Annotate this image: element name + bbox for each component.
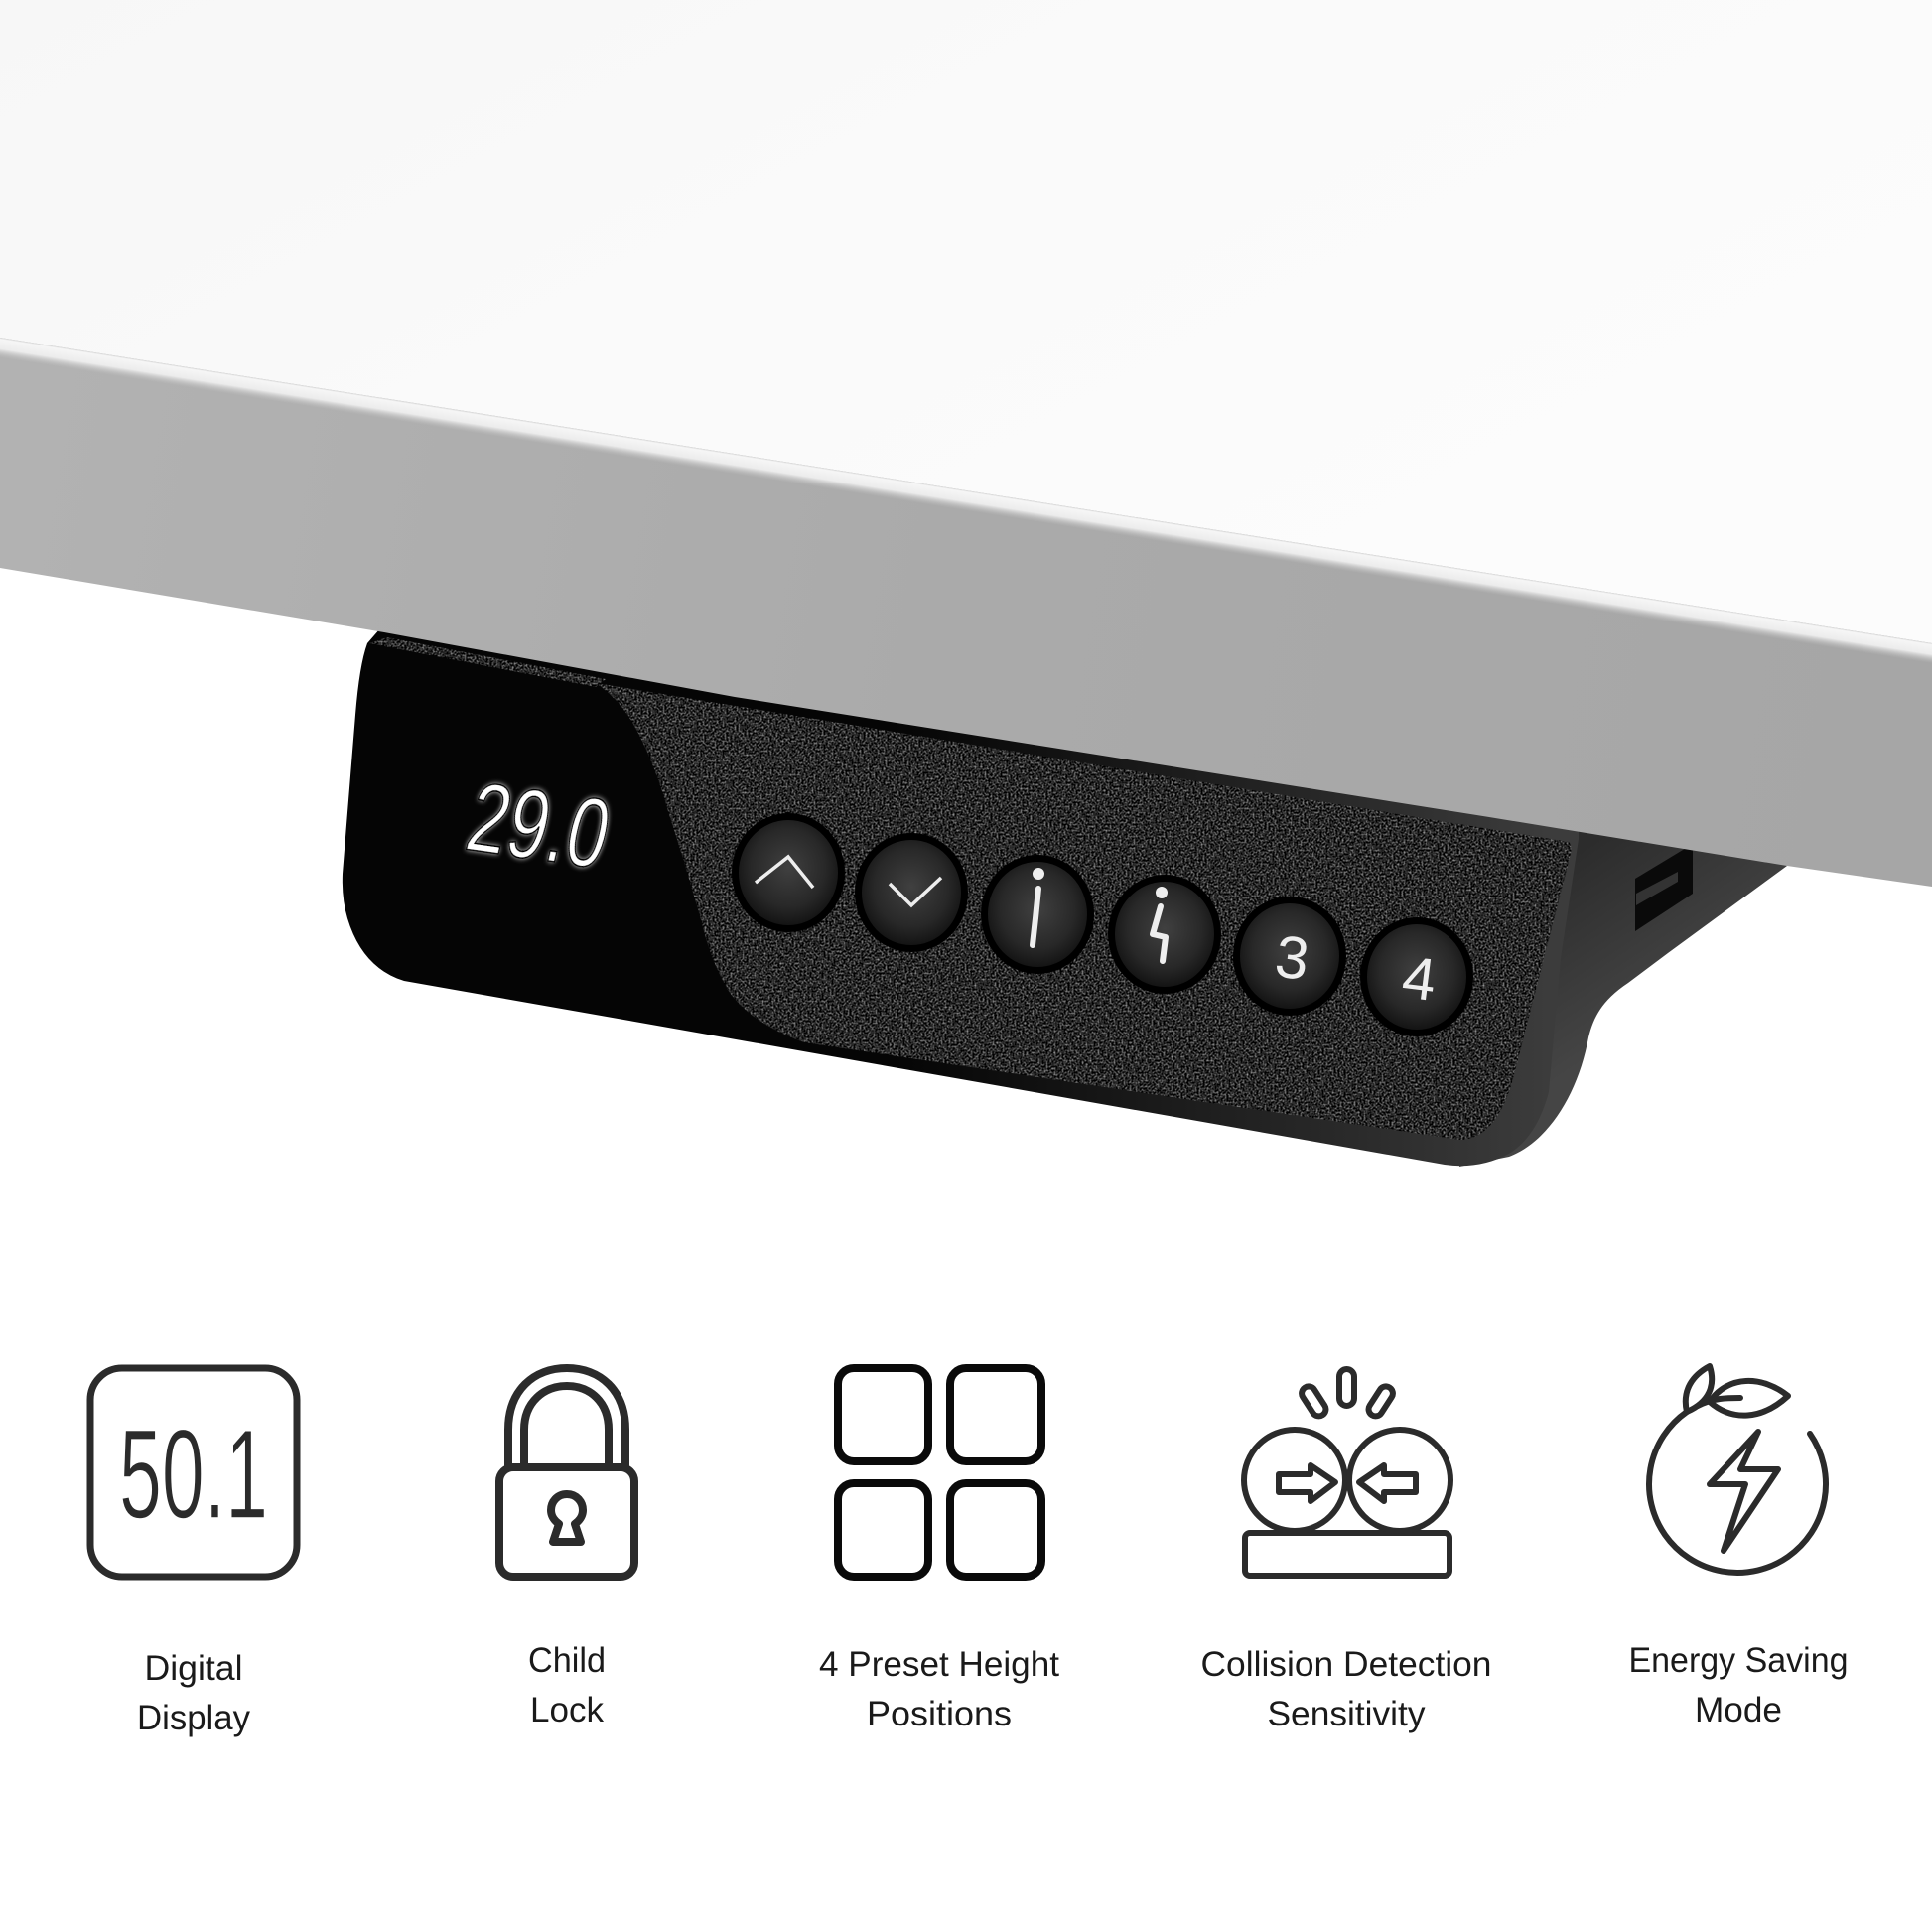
label: child lock: Child (528, 1641, 606, 1680)
button: preset 4: 4 (1399, 943, 1440, 1014)
icon: digital display (90, 1368, 297, 1577)
tabletop surface (0, 0, 1932, 643)
label: digital display: Digital (145, 1649, 242, 1688)
label: digital display (137, 1649, 250, 1737)
icon: collision detection (1244, 1369, 1450, 1576)
label: child lock (528, 1641, 606, 1729)
button: down (855, 833, 968, 952)
icon: child lock (499, 1368, 634, 1577)
textured keypad panel (369, 637, 1572, 1140)
label: collision detection sensitivity: Collision Detection (1201, 1645, 1491, 1684)
label: energy saving mode: Mode (1695, 1691, 1782, 1729)
button: sitting preset (1108, 875, 1221, 994)
label: four preset height positions: Positions (867, 1695, 1012, 1733)
label: child lock: Lock (530, 1691, 604, 1729)
icon: digital display: 50.1 (119, 1404, 268, 1546)
icon: four preset squares (838, 1368, 1041, 1577)
label: four preset height positions (819, 1645, 1059, 1733)
button: preset 4 (1360, 917, 1473, 1036)
button: preset 3: 3 (1272, 922, 1312, 993)
table edge front face (0, 338, 1932, 887)
display readout: 29.0 (458, 762, 621, 890)
button: standing preset (981, 855, 1094, 974)
icon: energy saving (1649, 1366, 1826, 1573)
button: preset 3 (1233, 897, 1346, 1016)
button: up (732, 813, 845, 932)
controller body (343, 621, 1579, 1166)
label: energy saving mode: Energy Saving (1628, 1641, 1849, 1680)
label: digital display: Display (137, 1699, 250, 1737)
label: four preset height positions: 4 Preset Height (819, 1645, 1059, 1684)
controller side housing with USB port (1459, 824, 1807, 1167)
label: collision detection sensitivity (1201, 1645, 1491, 1733)
label: energy saving mode (1628, 1641, 1849, 1729)
label: collision detection sensitivity: Sensitivity (1267, 1695, 1426, 1733)
